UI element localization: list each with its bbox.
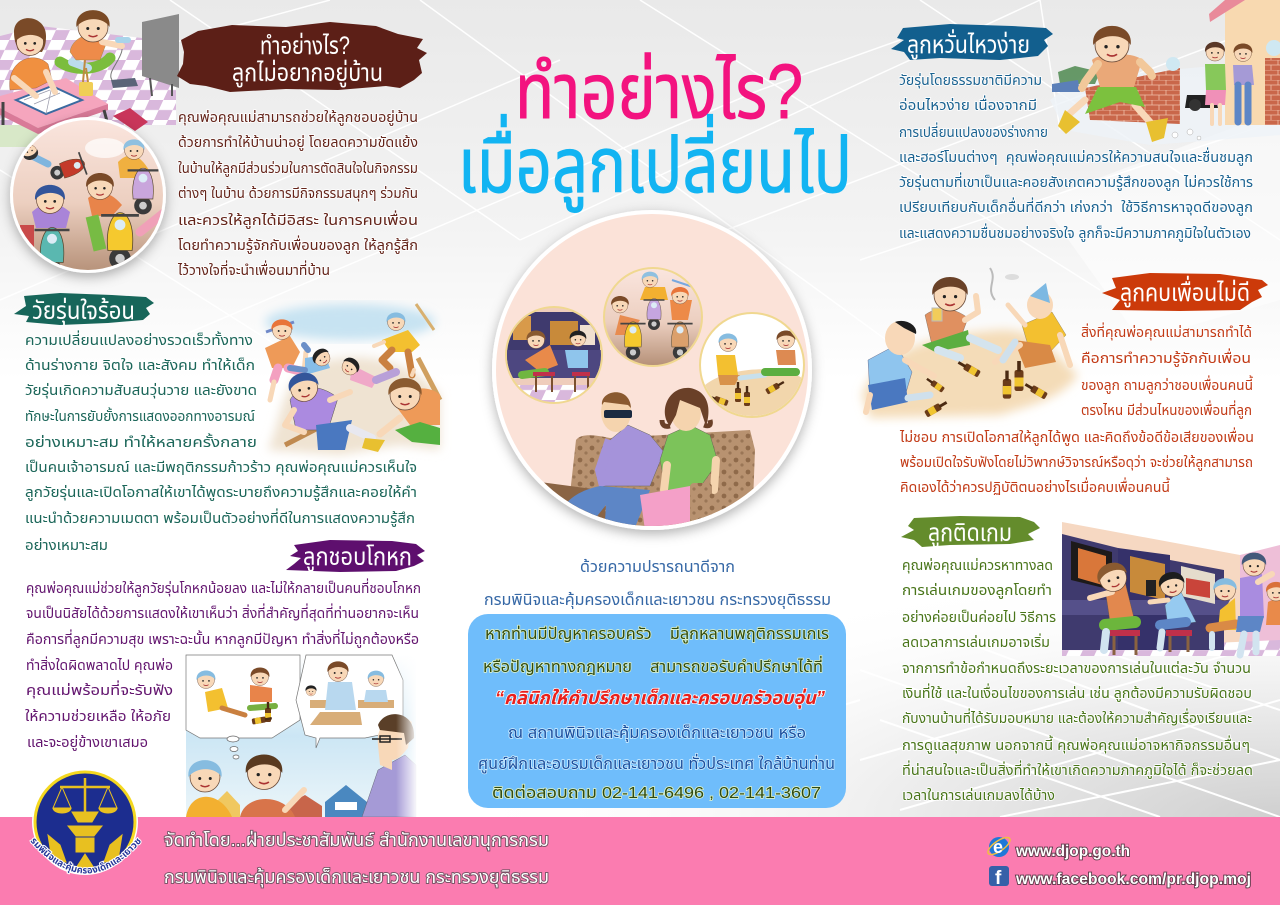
footer credit: กรมพินิจและคุ้มครองเด็กและเยาวชน กระทรวงยุติธรรม [164, 867, 549, 888]
text block: hot-tempered teens: ลูกวัยรุ่นและเปิดโอกาสให้เขาได้พูดระบายถึงความรู้สึกและคอยให้คำ [25, 484, 417, 501]
info box: clinic contact: ณ สถานพินิจและคุ้มครองเด็กและเยาวชน หรือ [508, 724, 806, 742]
text block: bad friends [899, 322, 1254, 496]
speech bubble [296, 655, 403, 748]
text block: hot-tempered teens: อย่างเหมาะสม ทำให้หลายครั้งกลาย [25, 433, 257, 451]
info box: clinic contact: หากท่านมีปัญหาครอบครัว มีลูกหลานพฤติกรรมเกเร [485, 625, 829, 643]
seal ribbon text [31, 842, 141, 874]
text block: how to keep kids home: โดยทำความรู้จักกับเพื่อนของลูก ให้ลูกรู้สึก [178, 235, 418, 254]
red books [113, 108, 148, 131]
father [568, 392, 663, 526]
text block: sensitive kids: และแสดงความชื่นชมอย่างจริงใจ ลูกก็จะมีความภาคภูมิใจในตัวเอง [899, 223, 1251, 242]
text block: hot-tempered teens: ความเปลี่ยนแปลงอย่างรวดเร็วทั้งทาง [25, 330, 253, 349]
info box: clinic contact: ติดต่อสอบถาม 02-141-6496 , 02-141-3607 [492, 784, 821, 802]
thought circle: arcade [505, 305, 605, 405]
text block: hot-tempered teens: วัยรุ่นเกิดความสับสนวุ่นวาย และยังขาด [25, 382, 257, 399]
text block: sensitive kids: และฮอร์โมนต่างๆ คุณพ่อคุณแม่ควรให้ความสนใจและชื่นชมลูก [899, 147, 1253, 166]
text block: hot-tempered teens: แนะนำด้วยความเมตตา พร้อมเป็นตัวอย่างที่ดีในการแสดงความรู้สึก [25, 508, 415, 527]
text block: game-addicted kids: ที่น่าสนใจและเป็นสิ่งที่ทำให้เขาเกิดความภาคภูมิใจได้ ก็จะช่วยลด [902, 760, 1253, 779]
mother [640, 388, 718, 530]
heading: how to keep kids home: ลูกไม่อยากอยู่บ้าน [232, 59, 383, 88]
greeting text: ด้วยความปรารถนาดีจาก [580, 559, 735, 576]
television [142, 14, 179, 96]
text block: game-addicted kids [902, 557, 1253, 804]
cup and ruler [79, 60, 93, 96]
text block: sensitive kids [899, 72, 1253, 242]
text block: game-addicted kids: คุณพ่อคุณแม่ควรหาทางลด [902, 557, 1053, 574]
text block: hot-tempered teens: ด้านร่างกาย จิตใจ และสังคม ทำให้เด็ก [25, 357, 255, 374]
seal scales and pedestal [48, 778, 122, 868]
sofa arm [690, 483, 712, 522]
text block: sensitive kids: อ่อนไหวง่าย เนื่องจากมี [899, 95, 1037, 114]
footer credit [164, 830, 549, 888]
text block: lying kids: คุณพ่อคุณแม่ช่วยให้ลูกวัยรุ่นโกหกน้อยลง และไม่ให้กลายเป็นคนที่ชอบโกหก [26, 578, 421, 597]
text block: hot-tempered teens: อย่างเหมาะสม [25, 537, 108, 554]
child at right [1266, 582, 1280, 625]
text block: lying kids: คือการที่ลูกมีความสุข เพราะฉะนั้น หากลูกมีปัญหา ทำสิ่งที่ไม่ถูกต้องหรือ [26, 629, 419, 648]
website link: www.djop.go.th [1015, 843, 1130, 860]
circle illustration: scooter gang [8, 115, 168, 280]
heading: how to keep kids home: ทำอย่างไร? [260, 32, 350, 60]
house [1209, 0, 1280, 125]
table with book [0, 78, 108, 134]
heading: sensitive kids [891, 24, 1053, 60]
standing boy [1236, 553, 1272, 655]
info box: clinic contact [468, 614, 846, 808]
text block: how to keep kids home: ในบ้านให้ลูกมีส่วนร่วมในการตัดสินใจในกิจกรรม [178, 160, 418, 177]
text block: sensitive kids: วัยรุ่นตามที่เขาเป็นและคอยสังเกตความรู้สึกของลูก ไม่ควรใช้การ [899, 172, 1253, 191]
blue-shirt kid [866, 321, 934, 412]
text block: hot-tempered teens: เป็นคนเจ้าอารมณ์ และมีพฤติกรรมก้าวร้าว คุณพ่อคุณแม่ควรเห็นใจ [25, 459, 417, 476]
boys talking [186, 754, 304, 817]
illustration: lying thought bubbles [186, 655, 418, 817]
text block: lying kids: และจะอยู่ข้างเขาเสมอ [27, 734, 148, 751]
sofa and parents [540, 388, 755, 535]
text block: bad friends: ของลูก ถามลูกว่าชอบเพื่อนคนนี้ [1081, 375, 1253, 394]
text block: bad friends: ไม่ชอบ การเปิดโอกาสให้ลูกได้พูด และคิดถึงข้อดีข้อเสียของเพื่อน [899, 427, 1254, 446]
website link: e [993, 837, 1003, 857]
game console [111, 78, 138, 88]
text block: bad friends: ตรงไหน มีส่วนไหนของเพื่อนที่ลูก [1081, 400, 1252, 419]
text block: lying kids: ให้ความช่วยเหลือ ให้อภัย [25, 708, 171, 725]
logo: department seal: กรมพินิจและคุ้มครองเด็กและเยาวชน [30, 836, 142, 874]
orange-hair kid [265, 319, 306, 400]
illustration: boy jumping wall [1050, 0, 1280, 145]
green-shorts kid with beer [922, 277, 998, 358]
heading: game-addicted kids [901, 516, 1040, 548]
text block: bad friends: คือการทำความรู้จักกับเพื่อน [1081, 348, 1251, 367]
text block: game-addicted kids: กับงานบ้านที่ได้รับมอบหมาย และต้องให้ความสำคัญเรื่องเรียนและ [902, 708, 1252, 727]
text block: game-addicted kids: จากการทำข้อกำหนดถึงระยะเวลาของการเล่นในแต่ละวัน จำนวน [902, 660, 1251, 677]
text block: sensitive kids: เปรียบเทียบกับเด็กอื่นที่ดีกว่า เก่งกว่า ใช้วิธีการหาจุดดีของลูก [899, 197, 1253, 216]
arcade machines [1062, 534, 1230, 650]
heading: lying kids: ลูกชอบโกหก [303, 543, 412, 572]
text block: game-addicted kids: การเล่นเกมของลูกโดยทำ [902, 582, 1052, 599]
girl writing [10, 18, 55, 96]
footer credit: จัดทำโดย...ฝ่ายประชาสัมพันธ์ สำนักงานเลขานุการกรม [164, 830, 549, 851]
boy playing [60, 10, 131, 68]
man with glasses [362, 714, 416, 817]
text block: sensitive kids: การเปลี่ยนแปลงของร่างกาย [899, 122, 1048, 141]
central circle: worried parents [492, 210, 812, 535]
text block: game-addicted kids: อย่างค่อยเป็นค่อยไป วิธีการ [902, 609, 1056, 626]
info box: clinic contact: ศูนย์ฝึกและอบรมเด็กและเยาวชน ทั่วประเทศ ใกล้บ้านท่าน [478, 753, 835, 773]
text block: bad friends: พร้อมเปิดใจรับฟังโดยไม่วิพากษ์วิจารณ์หรือดุว่า จะช่วยให้ลูกสามารถ [900, 454, 1253, 471]
illustration: kids at home [0, 10, 179, 147]
text block: bad friends: สิ่งที่คุณพ่อคุณแม่สามารถทำได้ [1081, 322, 1252, 341]
text block: how to keep kids home: ต่างๆ ในบ้าน ด้วยการมีกิจกรรมสนุกๆ ร่วมกัน [178, 185, 418, 202]
heading: bad friends: ลูกคบเพื่อนไม่ดี [1120, 275, 1250, 308]
illustration: arcade [1062, 522, 1280, 656]
blue-hair kid with stick [374, 304, 434, 375]
houses [213, 785, 367, 817]
player 2 [1150, 570, 1196, 652]
thought circle: drinking [699, 312, 805, 420]
text block: game-addicted kids: การดูแลสุขภาพ นอกจากนี้ คุณพ่อคุณแม่อาจหากิจกรรมอื่นๆ [902, 735, 1250, 754]
text block: hot-tempered teens: ทักษะในการยับยั้งการแสดงออกทางอารมณ์ [25, 407, 255, 425]
facebook link [989, 866, 1251, 889]
text block: game-addicted kids: เวลาในการเล่นเกมลงได้บ้าง [902, 787, 1055, 804]
text block: how to keep kids home: ไว้วางใจที่จะนำเพื่อนมาที่บ้าน [177, 260, 330, 279]
illustration: teen fight [265, 304, 440, 455]
heading: bad friends [1102, 273, 1268, 311]
text block: game-addicted kids: เงินที่ใช้ และในเงื่อนไขของการเล่น เช่น ลูกต้องมีความรับผิดชอบ [902, 683, 1252, 702]
heading: game-addicted kids: ลูกติดเกม [928, 519, 1012, 548]
text block: hot-tempered teens [25, 330, 417, 554]
logo: department seal [30, 770, 142, 875]
brick walls [1085, 40, 1280, 125]
facebook link: www.facebook.com/pr.djop.moj [1015, 871, 1251, 888]
text block: sensitive kids: วัยรุ่นโดยธรรมชาติมีความ [899, 72, 1042, 89]
text block: how to keep kids home: คุณพ่อคุณแม่สามารถช่วยให้ลูกชอบอยู่บ้าน [178, 109, 418, 126]
footer band [0, 817, 1280, 905]
info box: clinic contact: หรือปัญหาทางกฎหมาย สามารถขอรับคำปรึกษาได้ที่ [483, 655, 823, 676]
title [458, 49, 852, 212]
illustration: kids drinking and smoking [862, 268, 1078, 418]
parents [1185, 42, 1254, 124]
fallen kids [290, 345, 334, 375]
player 3 [1210, 578, 1237, 648]
blue-hair kid smoking [990, 268, 1070, 368]
greeting text [484, 559, 831, 609]
thought bubble [186, 655, 300, 759]
info box: clinic contact: “คลินิกให้คำปรึกษาเด็กและครอบครัวอบอุ่น” [495, 688, 825, 709]
jumping boy [1058, 26, 1168, 142]
facebook link: f [995, 868, 1002, 889]
dust puffs [1172, 129, 1201, 140]
text block: bad friends: คิดเองได้ว่าควรปฏิบัติตนอย่างไรเมื่อคบเพื่อนคนนี้ [900, 477, 1170, 496]
thought circle: scooters [603, 267, 703, 367]
player 1 [1090, 559, 1140, 655]
heading: how to keep kids home [177, 22, 427, 92]
text block: game-addicted kids: ลดเวลาการเล่นเกมอาจเริ่ม [902, 633, 1050, 651]
text block: lying kids: ทำสิ่งใดผิดพลาดไป คุณพ่อ [26, 656, 173, 674]
title: ทำอย่างไร? [515, 49, 803, 135]
text block: how to keep kids home [177, 109, 418, 279]
greeting text: กรมพินิจและคุ้มครองเด็กและเยาวชน กระทรวงยุติธรรม [484, 591, 831, 609]
text block: lying kids: จนเป็นนิสัยได้ด้วยการแสดงให้เขาเห็นว่า สิ่งที่สำคัญที่สุดที่ท่านอยากจะเห็น [26, 603, 419, 622]
orange-shirt fighter with bat [380, 358, 440, 445]
website link [985, 834, 1130, 860]
beer bottles [924, 359, 1048, 418]
purple-shirt fighter [285, 370, 385, 452]
text block: how to keep kids home: ด้วยการทำให้บ้านน่าอยู่ โดยลดความขัดแย้ง [178, 134, 418, 151]
title: เมื่อลูกเปลี่ยนไป [458, 114, 852, 212]
text block: lying kids [25, 578, 421, 751]
text block: how to keep kids home: และควรให้ลูกได้มีอิสระ ในการคบเพื่อน [178, 210, 418, 229]
heading: hot-tempered teens: วัยรุ่นใจร้อน [32, 297, 135, 326]
text block: lying kids: คุณแม่พร้อมที่จะรับฟัง [26, 680, 173, 699]
heading: sensitive kids: ลูกหวั่นไหวง่าย [907, 28, 1030, 60]
